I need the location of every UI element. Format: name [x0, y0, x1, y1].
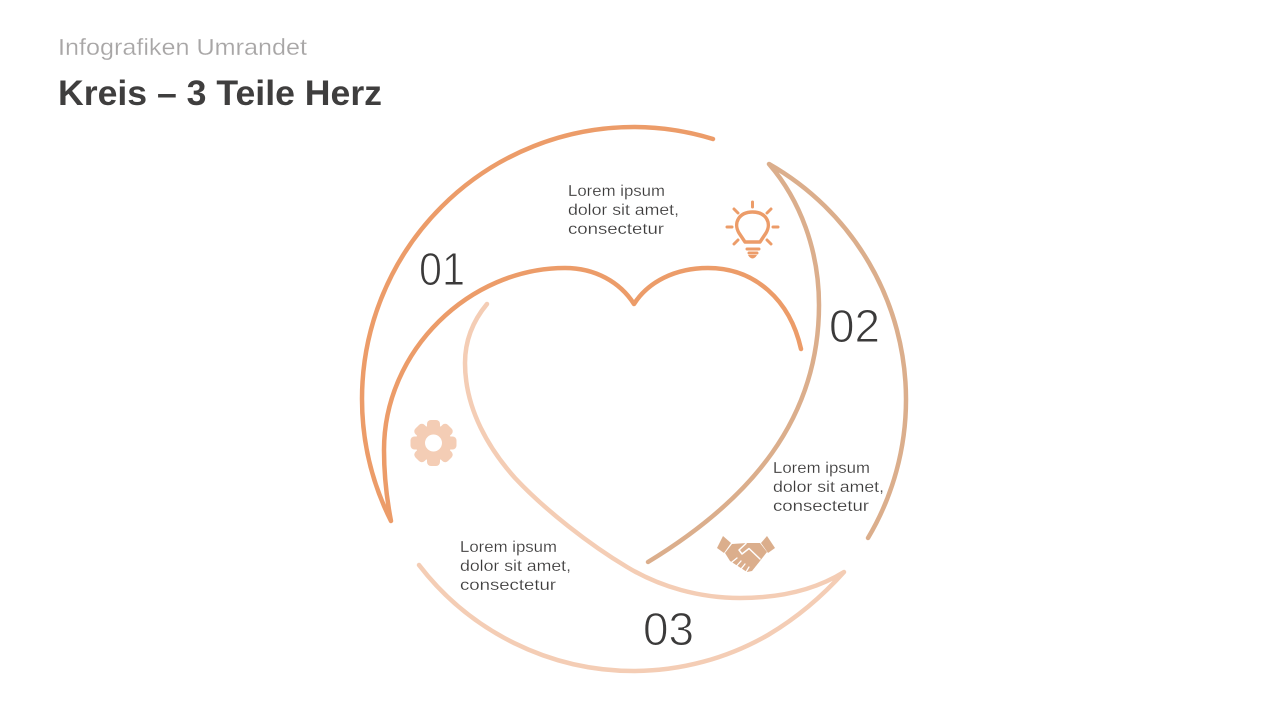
segment 2: tan outline — [648, 164, 906, 562]
text block 2: Lorem ipsum — [773, 460, 870, 477]
text block 1: consectetur — [568, 221, 665, 238]
text block 1 — [568, 183, 679, 238]
text block 2 — [773, 460, 884, 515]
segment 1: orange outline — [362, 127, 801, 521]
icon: gear — [410, 420, 456, 466]
text block 3: consectetur — [460, 577, 557, 594]
text block 2: dolor sit amet, — [773, 479, 884, 496]
text block 2: consectetur — [773, 498, 870, 515]
subtitle: Infografiken Umrandet — [58, 34, 308, 60]
icon: light bulb — [727, 202, 778, 258]
segment 3: light peach outline — [419, 304, 844, 671]
label 03: 03 — [643, 603, 694, 655]
text block 3: dolor sit amet, — [460, 558, 571, 575]
label 01: 01 — [419, 243, 465, 295]
label 02: 02 — [829, 300, 880, 352]
text block 1: Lorem ipsum — [568, 183, 665, 200]
text block 3: Lorem ipsum — [460, 539, 557, 556]
icon: handshake — [717, 536, 775, 572]
text block 1: dolor sit amet, — [568, 202, 679, 219]
text block 3 — [460, 539, 571, 594]
title: Kreis – 3 Teile Herz — [58, 74, 382, 113]
